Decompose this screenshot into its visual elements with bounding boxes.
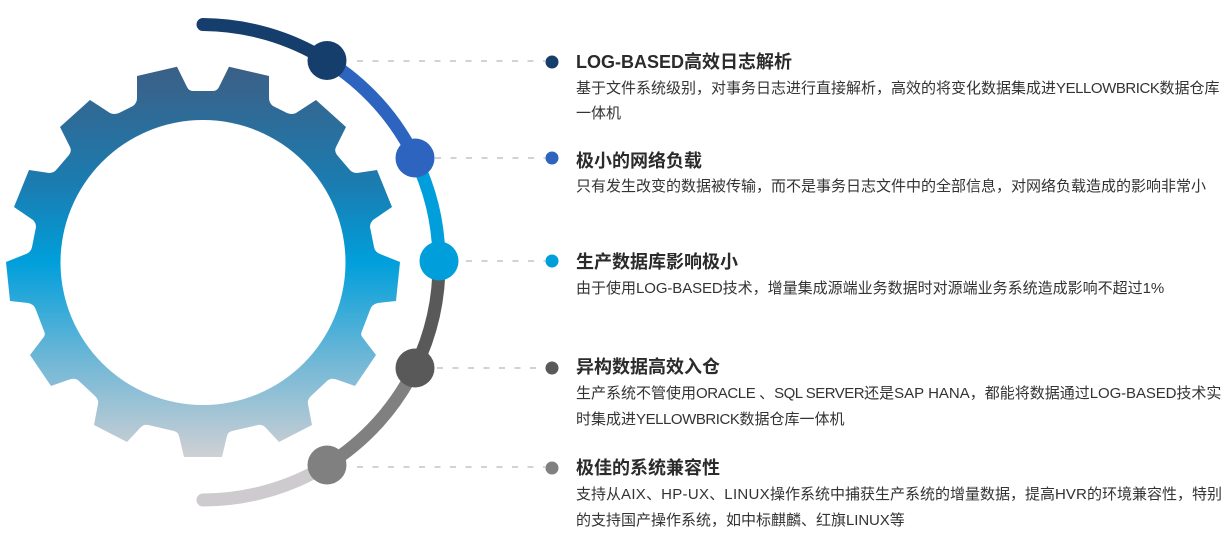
description: 一体机 xyxy=(576,105,621,122)
arc segment: light grey xyxy=(203,465,327,500)
bullet 4 xyxy=(546,362,558,374)
node 4 xyxy=(396,348,434,388)
text block: heterogeneous ingestion xyxy=(576,357,1221,428)
bullet 2 xyxy=(546,152,558,164)
description: 由于使用LOG-BASED技术，增量集成源端业务数据时对源端业务系统造成影响不超过1% xyxy=(576,280,1164,297)
text block: log-based parsing xyxy=(576,52,1219,122)
text block: compatibility xyxy=(576,458,1222,529)
description xyxy=(576,80,1219,122)
node 2 xyxy=(396,138,434,178)
heading: 生产数据库影响极小 xyxy=(576,252,738,272)
description: 基于文件系统级别，对事务日志进行直接解析，高效的将变化数据集成进YELLOWBRICK数据仓库 xyxy=(576,80,1219,97)
bullet 5 xyxy=(546,462,558,474)
heading: 异构数据高效入仓 xyxy=(576,357,720,377)
description: 的支持国产操作系统，如中标麒麟、红旗LINUX等 xyxy=(576,512,905,529)
bullet 1 xyxy=(546,56,558,68)
description: 支持从AIX、HP-UX、LINUX操作系统中捕获生产系统的增量数据，提高HVR的环境兼容性，特别 xyxy=(576,486,1222,503)
description xyxy=(576,486,1222,529)
heading: LOG-BASED高效日志解析 xyxy=(576,52,792,72)
heading: 极佳的系统兼容性 xyxy=(576,458,720,478)
arc segment: dark grey xyxy=(415,261,439,368)
bullet 3 xyxy=(546,254,558,268)
connector lines xyxy=(357,61,545,467)
arc segment: navy xyxy=(203,24,327,60)
node 3 xyxy=(420,242,458,280)
arc segment: mid grey xyxy=(327,368,415,465)
description: 只有发生改变的数据被传输，而不是事务日志文件中的全部信息，对网络负载造成的影响非常小 xyxy=(576,178,1206,195)
node 5 xyxy=(308,446,346,484)
text block: production impact xyxy=(576,252,1164,297)
icon: gear xyxy=(6,67,400,457)
description xyxy=(576,385,1221,428)
arc segment: blue xyxy=(327,60,415,158)
node 1 xyxy=(308,41,346,80)
description: 时集成进YELLOWBRICK数据仓库一体机 xyxy=(576,411,844,428)
description: 生产系统不管使用ORACLE 、SQL SERVER还是SAP HANA，都能将数据通过LOG-BASED技术实 xyxy=(576,385,1221,402)
heading: 极小的网络负载 xyxy=(576,151,702,171)
arc segment: cyan xyxy=(415,158,439,261)
text block: network load xyxy=(576,151,1206,195)
